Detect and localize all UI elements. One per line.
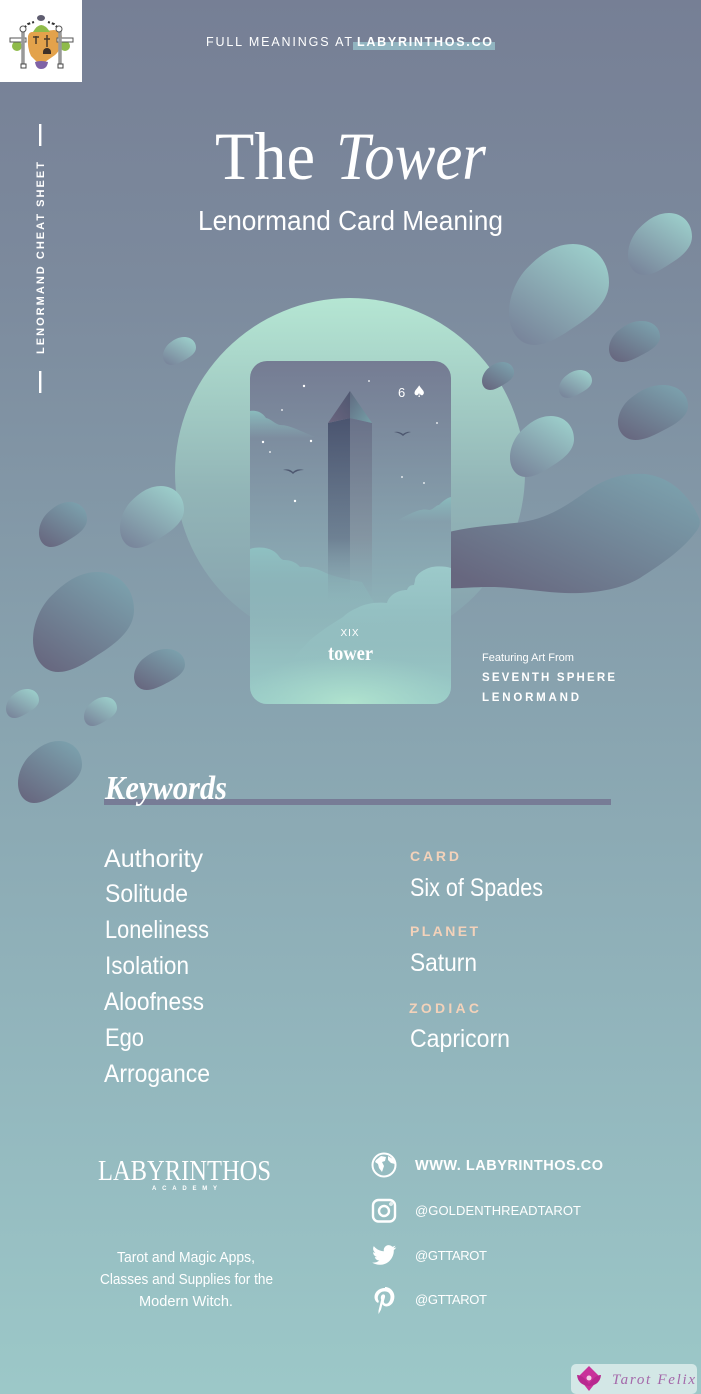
keyword list: Aloofness: [104, 988, 204, 1016]
top link: FULL MEANINGS AT: [206, 35, 352, 49]
tagline: Classes and Supplies for the: [100, 1272, 273, 1288]
tarot card: [250, 361, 451, 704]
academy logo: ACADEMY: [152, 1186, 217, 1192]
floating rocks: [6, 213, 692, 803]
tarot felix badge: [571, 1364, 697, 1394]
card number and suit: ♠: [412, 382, 426, 401]
card attribute: CARD: [410, 848, 459, 864]
website: WWW. LABYRINTHOS.CO: [415, 1158, 603, 1174]
art credit: Featuring Art From: [482, 652, 574, 664]
tagline: Tarot and Magic Apps,: [117, 1250, 255, 1266]
card numeral: XIX: [340, 628, 360, 639]
zodiac attribute: [409, 1000, 510, 1053]
twitter handle: @GTTAROT: [415, 1248, 487, 1263]
moon circle: [175, 298, 525, 648]
clouds behind tower: [250, 410, 451, 582]
top link: [206, 35, 495, 50]
keyword list: Loneliness: [105, 916, 209, 944]
keyword list: Isolation: [105, 952, 189, 980]
zodiac attribute: ZODIAC: [409, 1000, 479, 1016]
title: Tower: [336, 118, 486, 194]
stars: [262, 380, 438, 502]
art credit: [482, 652, 615, 704]
academy logo: LABYRINTHOS: [98, 1155, 271, 1187]
pinterest handle: @GTTAROT: [415, 1292, 487, 1307]
planet attribute: Saturn: [410, 949, 477, 977]
title: The: [215, 118, 315, 194]
card number and suit: 6: [398, 385, 405, 400]
vertical label: LENORMAND CHEAT SHEET: [35, 162, 47, 354]
zodiac attribute: Capricorn: [410, 1025, 510, 1053]
keyword list: Solitude: [105, 880, 188, 908]
card glow: [284, 671, 416, 704]
birds: [283, 432, 411, 474]
card attribute: Six of Spades: [410, 874, 543, 902]
logo badge: [0, 0, 82, 82]
keyword list: Arrogance: [104, 1060, 210, 1088]
icon: globe: [372, 1154, 396, 1176]
keywords heading: Keywords: [104, 770, 227, 807]
card number and suit: [398, 382, 426, 401]
planet attribute: PLANET: [410, 923, 478, 939]
card attribute: [410, 848, 543, 902]
title: [215, 118, 486, 194]
art credit: LENORMAND: [482, 692, 579, 704]
large wave rock: [445, 474, 700, 593]
planet attribute: [410, 923, 478, 977]
tarot felix badge: Tarot Felix: [612, 1372, 695, 1388]
icon: twitter: [372, 1245, 396, 1265]
top link: LABYRINTHOS.CO: [357, 35, 492, 49]
instagram handle: @GOLDENTHREADTAROT: [415, 1203, 581, 1218]
keyword list: Authority: [104, 845, 203, 873]
keywords heading: [104, 770, 611, 807]
icon: instagram: [373, 1200, 395, 1222]
tagline: Modern Witch.: [139, 1294, 233, 1310]
card name: tower: [328, 641, 373, 665]
keyword list: [104, 845, 210, 1088]
tower: [328, 391, 372, 580]
art credit: SEVENTH SPHERE: [482, 672, 615, 684]
icon: pinterest: [374, 1287, 394, 1314]
tagline: [100, 1250, 273, 1310]
cloud in front: [332, 566, 451, 626]
subtitle: Lenormand Card Meaning: [198, 205, 503, 236]
keyword list: Ego: [105, 1024, 144, 1052]
